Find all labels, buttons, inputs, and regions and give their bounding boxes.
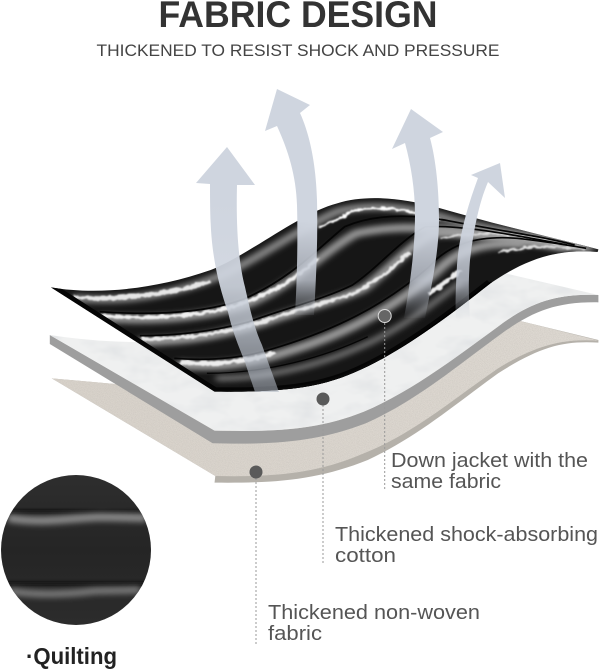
layered fabric diagram — [50, 198, 600, 483]
callout: non-woven fabric: fabric — [268, 623, 322, 645]
layer: non-woven fabric — [50, 317, 600, 483]
callout: shock-absorbing cotton: cotton — [335, 545, 396, 567]
quilting detail circle — [0, 474, 152, 626]
callout: down jacket fabric — [378, 310, 588, 493]
callout: non-woven fabric — [250, 466, 480, 645]
arrow 3 — [392, 109, 443, 318]
quilting label: ·Quilting — [26, 643, 117, 669]
callout: down jacket fabric: Down jacket with the — [391, 450, 588, 472]
callout: down jacket fabric: same fabric — [391, 471, 501, 493]
quilting rib shading — [77, 207, 590, 378]
quilting seams — [75, 208, 586, 373]
subtitle: THICKENED TO RESIST SHOCK AND PRESSURE — [96, 42, 500, 60]
layer: quilted down jacket fabric — [51, 198, 598, 395]
callout: shock-absorbing cotton: Thickened shock-absorbing — [335, 524, 598, 546]
arrow 2 — [265, 89, 317, 315]
arrow 1 — [196, 147, 279, 392]
callout: non-woven fabric: Thickened non-woven — [268, 602, 480, 624]
layer: shock-absorbing cotton — [50, 270, 600, 444]
callout: shock-absorbing cotton — [316, 392, 598, 567]
arrow 4 — [456, 163, 505, 322]
